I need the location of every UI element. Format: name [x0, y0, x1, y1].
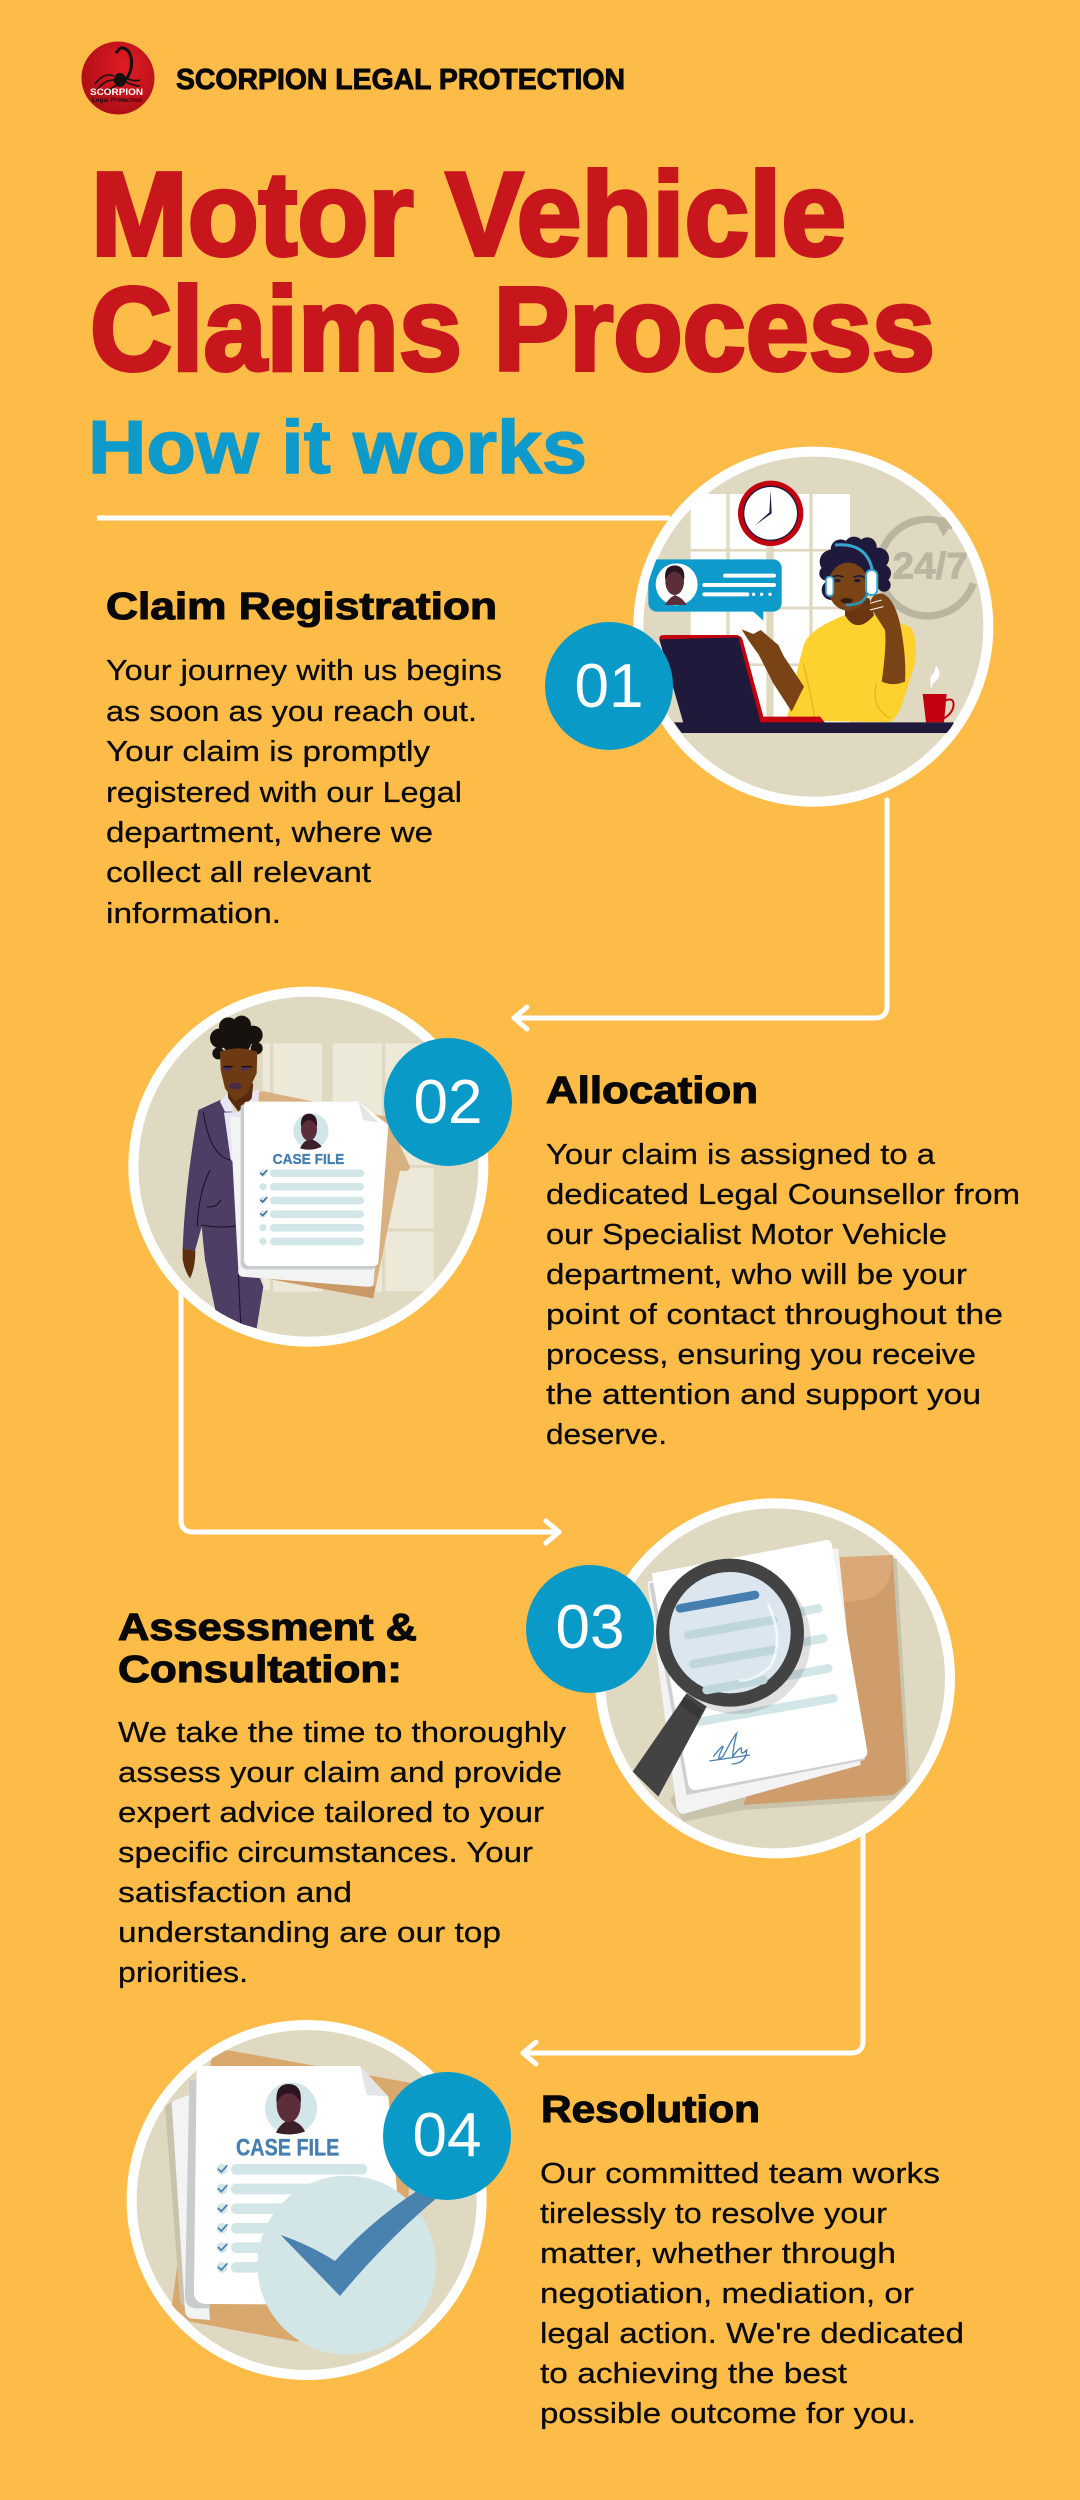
badge: 02: 02	[414, 1068, 482, 1137]
arrow: step 1 to step 2	[514, 800, 887, 1029]
heading: Resolution	[541, 2089, 760, 2131]
icon: scorpion logo	[82, 42, 154, 114]
text block: claim registration	[106, 586, 502, 930]
case file papers	[230, 1102, 388, 1287]
arrow: step 2 to step 3	[181, 1290, 559, 1543]
heading: Allocation	[546, 1070, 758, 1112]
document stack	[647, 1540, 867, 1814]
title: Claims Process	[90, 263, 935, 396]
window	[691, 494, 850, 724]
badge: 03	[526, 1565, 654, 1693]
title	[90, 148, 935, 396]
panel: step 4 illustration, completed case file	[132, 2025, 482, 2375]
body text: the attention and support you	[546, 1379, 981, 1411]
body text	[106, 655, 502, 930]
badge: 03: 03	[556, 1593, 624, 1662]
speech bubble	[648, 559, 782, 621]
case file sheets	[172, 2066, 397, 2320]
text block: assessment and consultation	[118, 1607, 567, 1989]
body text: Your claim is promptly	[106, 736, 431, 768]
badge: 04	[383, 2072, 511, 2200]
body text: priorities.	[118, 1957, 248, 1989]
heading: Assessment &	[118, 1607, 417, 1649]
arrow: step 3 to step 4	[523, 1830, 863, 2064]
counsellor figure	[183, 1016, 263, 1328]
body text: satisfaction and	[118, 1877, 352, 1909]
body text: as soon as you reach out.	[106, 696, 477, 728]
body text: point of contact throughout the	[546, 1299, 1003, 1331]
body text: registered with our Legal	[106, 777, 462, 809]
body text: dedicated Legal Counsellor from	[546, 1179, 1020, 1211]
magnifying glass	[633, 1559, 811, 1797]
heading: Claim Registration	[106, 586, 497, 628]
icon: 24/7: 24/7	[893, 544, 968, 586]
top divider line	[97, 516, 670, 520]
panel: step 1 illustration, call-centre agent	[638, 452, 988, 802]
envelope	[670, 1555, 910, 1822]
window panes	[263, 1043, 434, 1292]
body text: expert advice tailored to your	[118, 1797, 544, 1829]
body text: to achieving the best	[540, 2358, 847, 2390]
body text: collect all relevant	[106, 857, 371, 889]
case file papers: CASE FILE	[273, 1151, 344, 1168]
body text: understanding are our top	[118, 1917, 501, 1949]
body text: process, ensuring you receive	[546, 1339, 976, 1371]
heading	[118, 1607, 417, 1691]
body text: Our committed team works	[540, 2158, 940, 2190]
coffee mug	[923, 665, 954, 722]
badge: 02	[384, 1038, 512, 1166]
company name: SCORPION LEGAL PROTECTION	[176, 64, 625, 96]
body text: information.	[106, 898, 281, 930]
icon: scorpion logo: SCORPION	[90, 87, 143, 97]
body text: deserve.	[546, 1419, 667, 1451]
header: logo and company name	[82, 42, 625, 114]
body text	[118, 1717, 567, 1989]
icon: scorpion logo: Legal Protection	[92, 98, 142, 104]
body text: our Specialist Motor Vehicle	[546, 1219, 947, 1251]
laptop	[659, 635, 825, 723]
body text	[546, 1139, 1020, 1451]
body text: negotiation, mediation, or	[540, 2278, 914, 2310]
body text	[540, 2158, 964, 2430]
case file sheets: CASE FILE	[236, 2135, 339, 2162]
text block: resolution	[540, 2089, 964, 2430]
agent figure	[742, 537, 916, 722]
icon: 24/7	[879, 517, 973, 616]
badge: 01: 01	[575, 652, 643, 721]
body text: Your claim is assigned to a	[546, 1139, 936, 1171]
body text: assess your claim and provide	[118, 1757, 562, 1789]
body text: possible outcome for you.	[540, 2398, 916, 2430]
desk	[674, 722, 954, 733]
panel: step 2 illustration, counsellor with case file	[133, 992, 483, 1342]
text block: allocation	[546, 1070, 1020, 1451]
case folder	[258, 1091, 410, 1298]
heading: Consultation:	[118, 1649, 402, 1691]
body text: We take the time to thoroughly	[118, 1717, 567, 1749]
body text: tirelessly to resolve your	[540, 2198, 887, 2230]
body text: Your journey with us begins	[106, 655, 502, 687]
body text: department, where we	[106, 817, 433, 849]
subtitle: How it works	[88, 405, 587, 489]
icon: large check mark	[257, 2176, 438, 2354]
badge: 01	[545, 622, 673, 750]
folder	[172, 2050, 413, 2342]
panel: step 3 illustration, magnifier over document	[600, 1503, 950, 1853]
icon: wall clock	[738, 481, 803, 546]
body text: legal action. We're dedicated	[540, 2318, 964, 2350]
body text: department, who will be your	[546, 1259, 967, 1291]
body text: specific circumstances. Your	[118, 1837, 533, 1869]
body text: matter, whether through	[540, 2238, 896, 2270]
title: Motor Vehicle	[91, 148, 846, 281]
badge: 04: 04	[413, 2101, 481, 2170]
